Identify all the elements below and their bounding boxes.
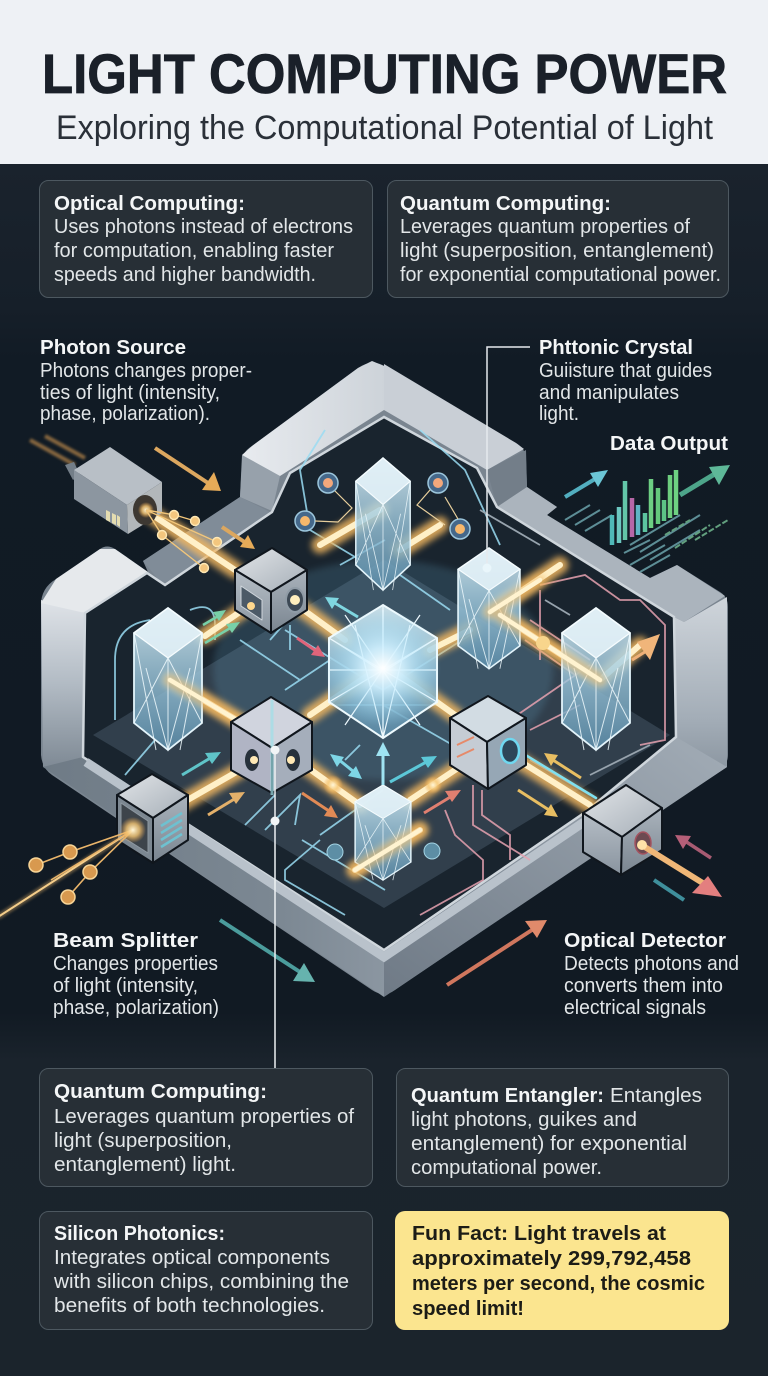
leader: beam splitter <box>270 746 280 1068</box>
callout: fun fact <box>395 1211 729 1330</box>
photon source <box>30 436 162 534</box>
arrow: coral <box>424 790 461 813</box>
panel: optical computing <box>40 180 372 298</box>
bottom right wall <box>384 737 727 997</box>
arrow: center up <box>376 742 390 785</box>
panel: quantum computing top: light (superposition, entanglement) <box>400 240 714 262</box>
data rows <box>565 505 700 572</box>
label: photonic crystal <box>539 336 712 425</box>
callout: fun fact: meters per second, the cosmic <box>412 1273 705 1295</box>
upper wall right top face <box>384 364 524 470</box>
upper wall right face <box>487 450 527 507</box>
arrow: teal lower <box>390 756 437 782</box>
crystal: center <box>325 605 441 738</box>
arrow: green <box>680 465 730 495</box>
arrow: teal big <box>220 920 315 982</box>
notch slab left <box>143 497 270 585</box>
label: beam splitter <box>53 929 219 1019</box>
panel: silicon photonics: Silicon Photonics: <box>54 1222 225 1245</box>
label: optical detector <box>564 929 739 1019</box>
label: photonic crystal: Guiisture that guides <box>539 360 712 382</box>
panel: quantum computing bottom: entanglement) light. <box>54 1154 236 1176</box>
arrow: pink <box>297 638 325 657</box>
panel: quantum entangler: computational power. <box>411 1157 602 1179</box>
panel: quantum computing bottom: light (superposition, <box>54 1130 232 1152</box>
label: photon source: Photon Source <box>40 336 186 359</box>
left wall <box>41 600 85 767</box>
panel: quantum entangler: Quantum Entangler: <box>411 1084 604 1107</box>
label: photon source: Photons changes proper- <box>40 360 252 382</box>
arrow: yellow up left <box>544 753 581 778</box>
cube: optical detector <box>583 785 662 875</box>
floor platform <box>93 560 670 908</box>
arrow: peach up right <box>632 650 648 660</box>
panel: silicon photonics: Integrates optical components <box>54 1247 330 1269</box>
label: photonic crystal: Phttonic Crystal <box>539 336 693 359</box>
beam: detector output <box>637 840 722 897</box>
bottom left wall <box>43 757 384 997</box>
panel: quantum computing bottom: Quantum Computing: <box>54 1080 267 1103</box>
subtitle: Exploring the Computational Potential of Light <box>56 109 714 147</box>
upper wall grey face <box>240 455 280 511</box>
panel: quantum computing bottom <box>40 1068 372 1186</box>
pink waveguides <box>420 575 665 915</box>
panel: silicon photonics <box>40 1212 372 1330</box>
arrow: orange <box>302 793 338 818</box>
arrow: cyan up left <box>325 597 358 617</box>
light beams over crystals <box>170 580 600 870</box>
flow arrows <box>155 448 711 985</box>
upper wall left top face <box>242 361 384 476</box>
input laser rays <box>0 817 146 917</box>
panel: quantum computing top: Quantum Computing: <box>400 192 611 215</box>
arrow: cyan double <box>330 754 362 779</box>
cube: interference module <box>450 696 526 789</box>
callout: fun fact: Fun Fact: Light travels at <box>412 1223 666 1245</box>
crystal: upper right <box>458 548 520 669</box>
light lines <box>480 510 650 795</box>
callout: fun fact: approximately 299,792,458 <box>412 1248 691 1270</box>
label: optical detector: electrical signals <box>564 997 706 1019</box>
panel: quantum entangler <box>396 1068 728 1186</box>
arrow: coral big <box>447 920 547 985</box>
crystal: top <box>356 458 410 590</box>
label: optical detector: Optical Detector <box>564 929 726 952</box>
panel: quantum entangler: Entangles <box>610 1085 702 1107</box>
panel: silicon photonics: with silicon chips, combining the <box>53 1271 349 1293</box>
panel: quantum computing top: for exponential computational power. <box>400 264 721 286</box>
arrow: pink return <box>675 835 711 858</box>
data output chart <box>565 432 730 572</box>
label: photon source: phase, polarization). <box>40 403 210 425</box>
center glow on floor <box>213 560 553 780</box>
panel: optical computing: speeds and higher bandwidth. <box>54 264 316 286</box>
callout: fun fact: speed limit! <box>412 1298 524 1320</box>
source photon rays <box>146 510 222 572</box>
label: optical detector: converts them into <box>564 975 723 997</box>
background beams glow <box>135 510 640 870</box>
cube: modulator upper <box>235 548 307 633</box>
panel: optical computing: Uses photons instead of electrons <box>54 216 353 238</box>
right wall <box>674 597 727 800</box>
arrow: to frame top left <box>155 448 221 491</box>
arrow: teal <box>182 752 221 775</box>
atom nodes <box>295 473 470 860</box>
label: photon source <box>40 336 252 425</box>
waveguide lines <box>115 430 500 915</box>
leader: photonic crystal <box>482 347 530 572</box>
panel: optical computing: Optical Computing: <box>54 192 245 215</box>
crystal: right <box>562 608 630 750</box>
arrow: gold <box>208 792 245 815</box>
label: beam splitter: of light (intensity, <box>53 975 198 997</box>
cube: input laser <box>117 774 188 863</box>
label: beam splitter: Changes properties <box>53 953 218 975</box>
panel: quantum computing top <box>388 180 728 298</box>
arrow: to modulator <box>222 527 255 549</box>
panel: quantum computing top: Leverages quantum properties of <box>400 216 690 238</box>
left wall top face <box>41 549 148 613</box>
arrow: yellow down right <box>518 790 558 817</box>
chip interior <box>83 417 676 950</box>
header band <box>0 0 768 164</box>
lower ledge highlight <box>86 762 584 957</box>
chip frame <box>41 361 728 997</box>
panel: quantum computing bottom: Leverages quantum properties of <box>54 1106 354 1128</box>
label: photonic crystal: light. <box>539 403 579 425</box>
panel: quantum entangler: light photons, guikes and <box>411 1109 637 1131</box>
bars <box>612 470 676 545</box>
crystal: left <box>134 608 202 750</box>
label: photonic crystal: and manipulates <box>539 382 679 404</box>
cube: beam splitter <box>231 697 312 795</box>
panel: quantum entangler: entanglement) for exponential <box>411 1133 687 1155</box>
arrow: cyan <box>565 470 608 497</box>
panel: optical computing: for computation, enabling faster <box>54 240 334 262</box>
right top face <box>497 487 725 622</box>
label: beam splitter: phase, polarization) <box>53 997 219 1019</box>
label: photon source: ties of light (intensity, <box>40 382 220 404</box>
arrow: green pair <box>203 610 240 643</box>
arrow: teal dash <box>654 880 684 900</box>
crystal: bottom <box>355 785 411 880</box>
data output label: Data Output <box>610 432 728 455</box>
label: beam splitter: Beam Splitter <box>53 929 198 952</box>
label: optical detector: Detects photons and <box>564 953 739 975</box>
panel: silicon photonics: benefits of both technologies. <box>54 1295 325 1317</box>
